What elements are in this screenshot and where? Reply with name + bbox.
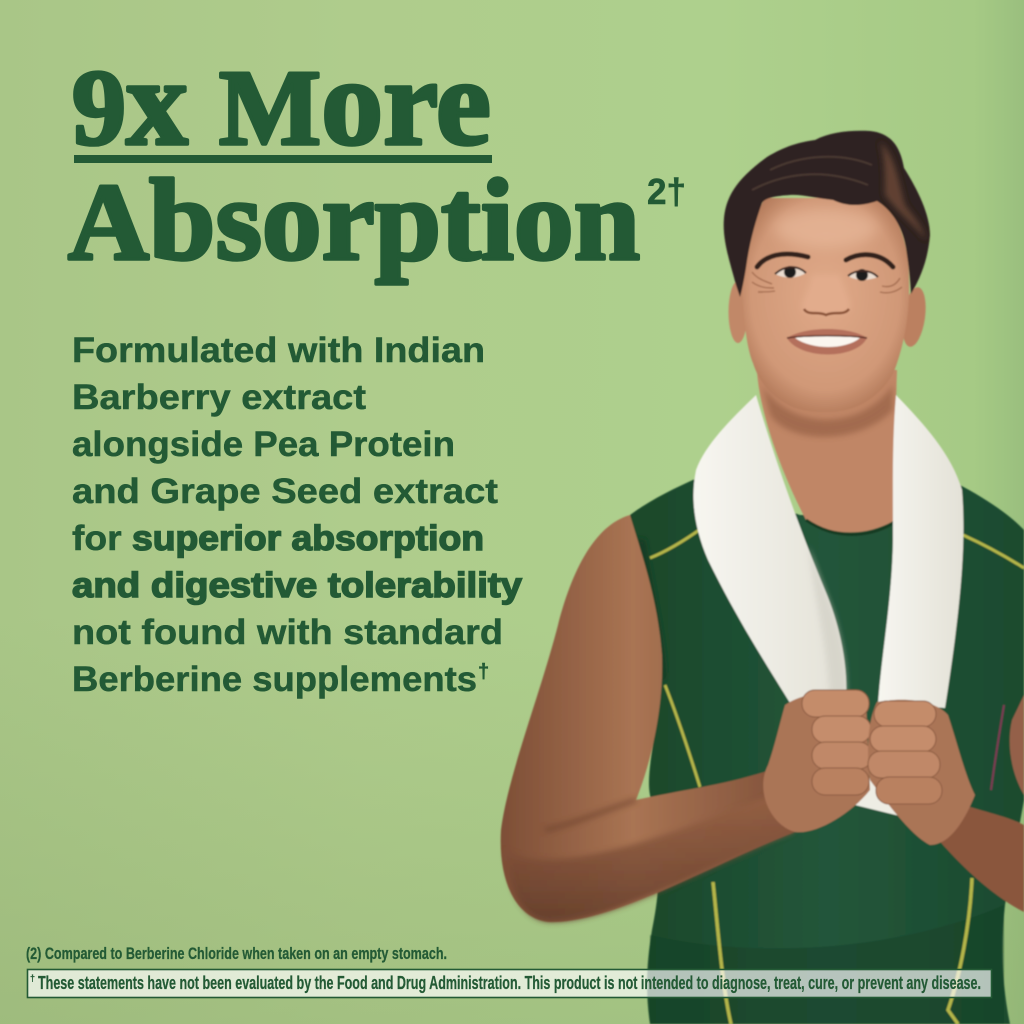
forehead light (774, 208, 878, 248)
body text: and digestive tolerability (72, 566, 523, 605)
shirt seams (650, 528, 1024, 1024)
shirt (630, 479, 1024, 1024)
face (742, 198, 909, 412)
chin shadow on neck (762, 385, 893, 437)
nose shadow (804, 309, 849, 315)
eye wrinkles (752, 272, 902, 293)
neck (757, 370, 897, 532)
title superscript: 2† (647, 171, 686, 212)
arm: left side of image (501, 515, 795, 922)
body text: Berberine supplements (72, 660, 477, 699)
towel: right strip (878, 395, 963, 708)
hair (724, 131, 930, 297)
photo: man with towel (501, 131, 1024, 1024)
upper arm sliver (1010, 695, 1024, 795)
body text: Formulated with Indian (72, 331, 485, 370)
towel: hanging end (838, 770, 908, 818)
footnote: (2) Compared to Berberine Chloride when taken on an empty stomach. (26, 944, 447, 963)
body text: † (478, 661, 489, 683)
body text (72, 331, 523, 699)
towel shading (808, 545, 846, 700)
body text: for superior absorption (72, 519, 484, 558)
title (68, 34, 686, 285)
ear left (728, 281, 748, 343)
body text: alongside Pea Protein (72, 425, 455, 464)
forearm shading (505, 790, 795, 922)
nose (802, 275, 850, 315)
hand: left (763, 690, 872, 832)
title line 1: 9x More (72, 34, 491, 171)
ear right (899, 286, 929, 348)
mouth (787, 329, 867, 354)
body text: and Grape Seed extract (72, 472, 498, 511)
disclaimer box: † (30, 973, 35, 983)
title line 2: Absorption (68, 156, 640, 285)
arm: right side of image (930, 800, 1024, 912)
eyebrows (757, 254, 893, 267)
eyes (775, 266, 878, 281)
towel: left strip (693, 395, 846, 703)
hand: right (868, 700, 975, 845)
body text: not found with standard (72, 613, 503, 652)
arm inner crease (545, 800, 636, 830)
title underline (74, 155, 492, 163)
collar (806, 520, 895, 534)
body text: Barberry extract (72, 378, 366, 417)
